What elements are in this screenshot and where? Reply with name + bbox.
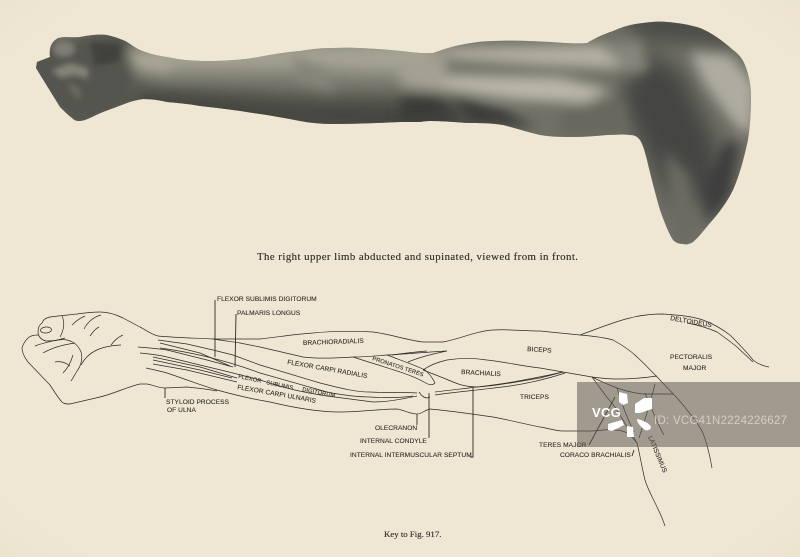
watermark id: ID: VCG41N2224226627 [654, 415, 787, 427]
anatomical labels: FLEXOR CARPI ULNARIS [237, 384, 317, 405]
deltoideus [580, 314, 769, 367]
anatomical labels: TERES MAJOR [539, 442, 587, 449]
anatomical labels: PALMARIS LONGUS [237, 310, 301, 317]
watermark logo [592, 392, 652, 437]
anatomical labels: FLEXOR CARPI RADIALIS [287, 359, 368, 380]
shoulder shading [690, 52, 755, 135]
lower contour [146, 368, 665, 526]
caption: top figure: The right upper limb abducted and supinated, viewed from in front. [257, 251, 578, 263]
pronator teres [353, 357, 435, 385]
fist details [90, 42, 122, 66]
caption: key: Key to Fig. 917. [384, 529, 441, 539]
anatomical labels: MAJOR [683, 365, 707, 372]
hand and upper outline [38, 312, 158, 381]
watermark band [577, 382, 800, 447]
axillary lines [592, 377, 637, 443]
anatomical labels: PRONATOS TERES [371, 356, 424, 378]
anatomical labels: BICEPS [527, 346, 552, 355]
anatomical labels: INTERNAL CONDYLE [360, 438, 427, 445]
anatomical labels [166, 296, 713, 474]
anatomical labels: INTERNAL INTERMUSCULAR SEPTUM [350, 452, 472, 459]
anatomical labels: STYLOID PROCESS [166, 399, 230, 406]
watermark logo: VCG [592, 405, 621, 420]
anatomical labels: FLEXOR [238, 374, 262, 385]
forearm tendons [213, 339, 447, 358]
anatomical labels: CORACO BRACHIALIS [560, 452, 631, 459]
anatomical labels: FLEXOR SUBLIMIS DIGITORUM [217, 296, 317, 303]
anatomical labels: PECTORALIS [670, 354, 713, 361]
photograph: abducted supinated arm [36, 22, 751, 244]
anatomical labels: TRICEPS [520, 394, 549, 401]
hand details [40, 327, 52, 333]
key line drawing [22, 312, 769, 526]
anatomical labels: DIGITORUM [302, 387, 336, 399]
anatomical labels: OLECRANON [375, 425, 417, 432]
anatomical labels: BRACHIORADIALIS [303, 338, 364, 347]
anatomical labels: DELTOIDEUS [670, 315, 713, 329]
anatomical labels: SUBLIMIS [266, 380, 294, 392]
fist shading [36, 34, 137, 121]
leader lines [165, 300, 634, 457]
brachialis [423, 358, 657, 379]
anatomical labels: BRACHIALIS [461, 369, 501, 378]
anatomical labels: OF ULNA [167, 407, 196, 414]
top contour [158, 330, 712, 468]
anatomical labels: LATISSIMUS [646, 435, 668, 474]
